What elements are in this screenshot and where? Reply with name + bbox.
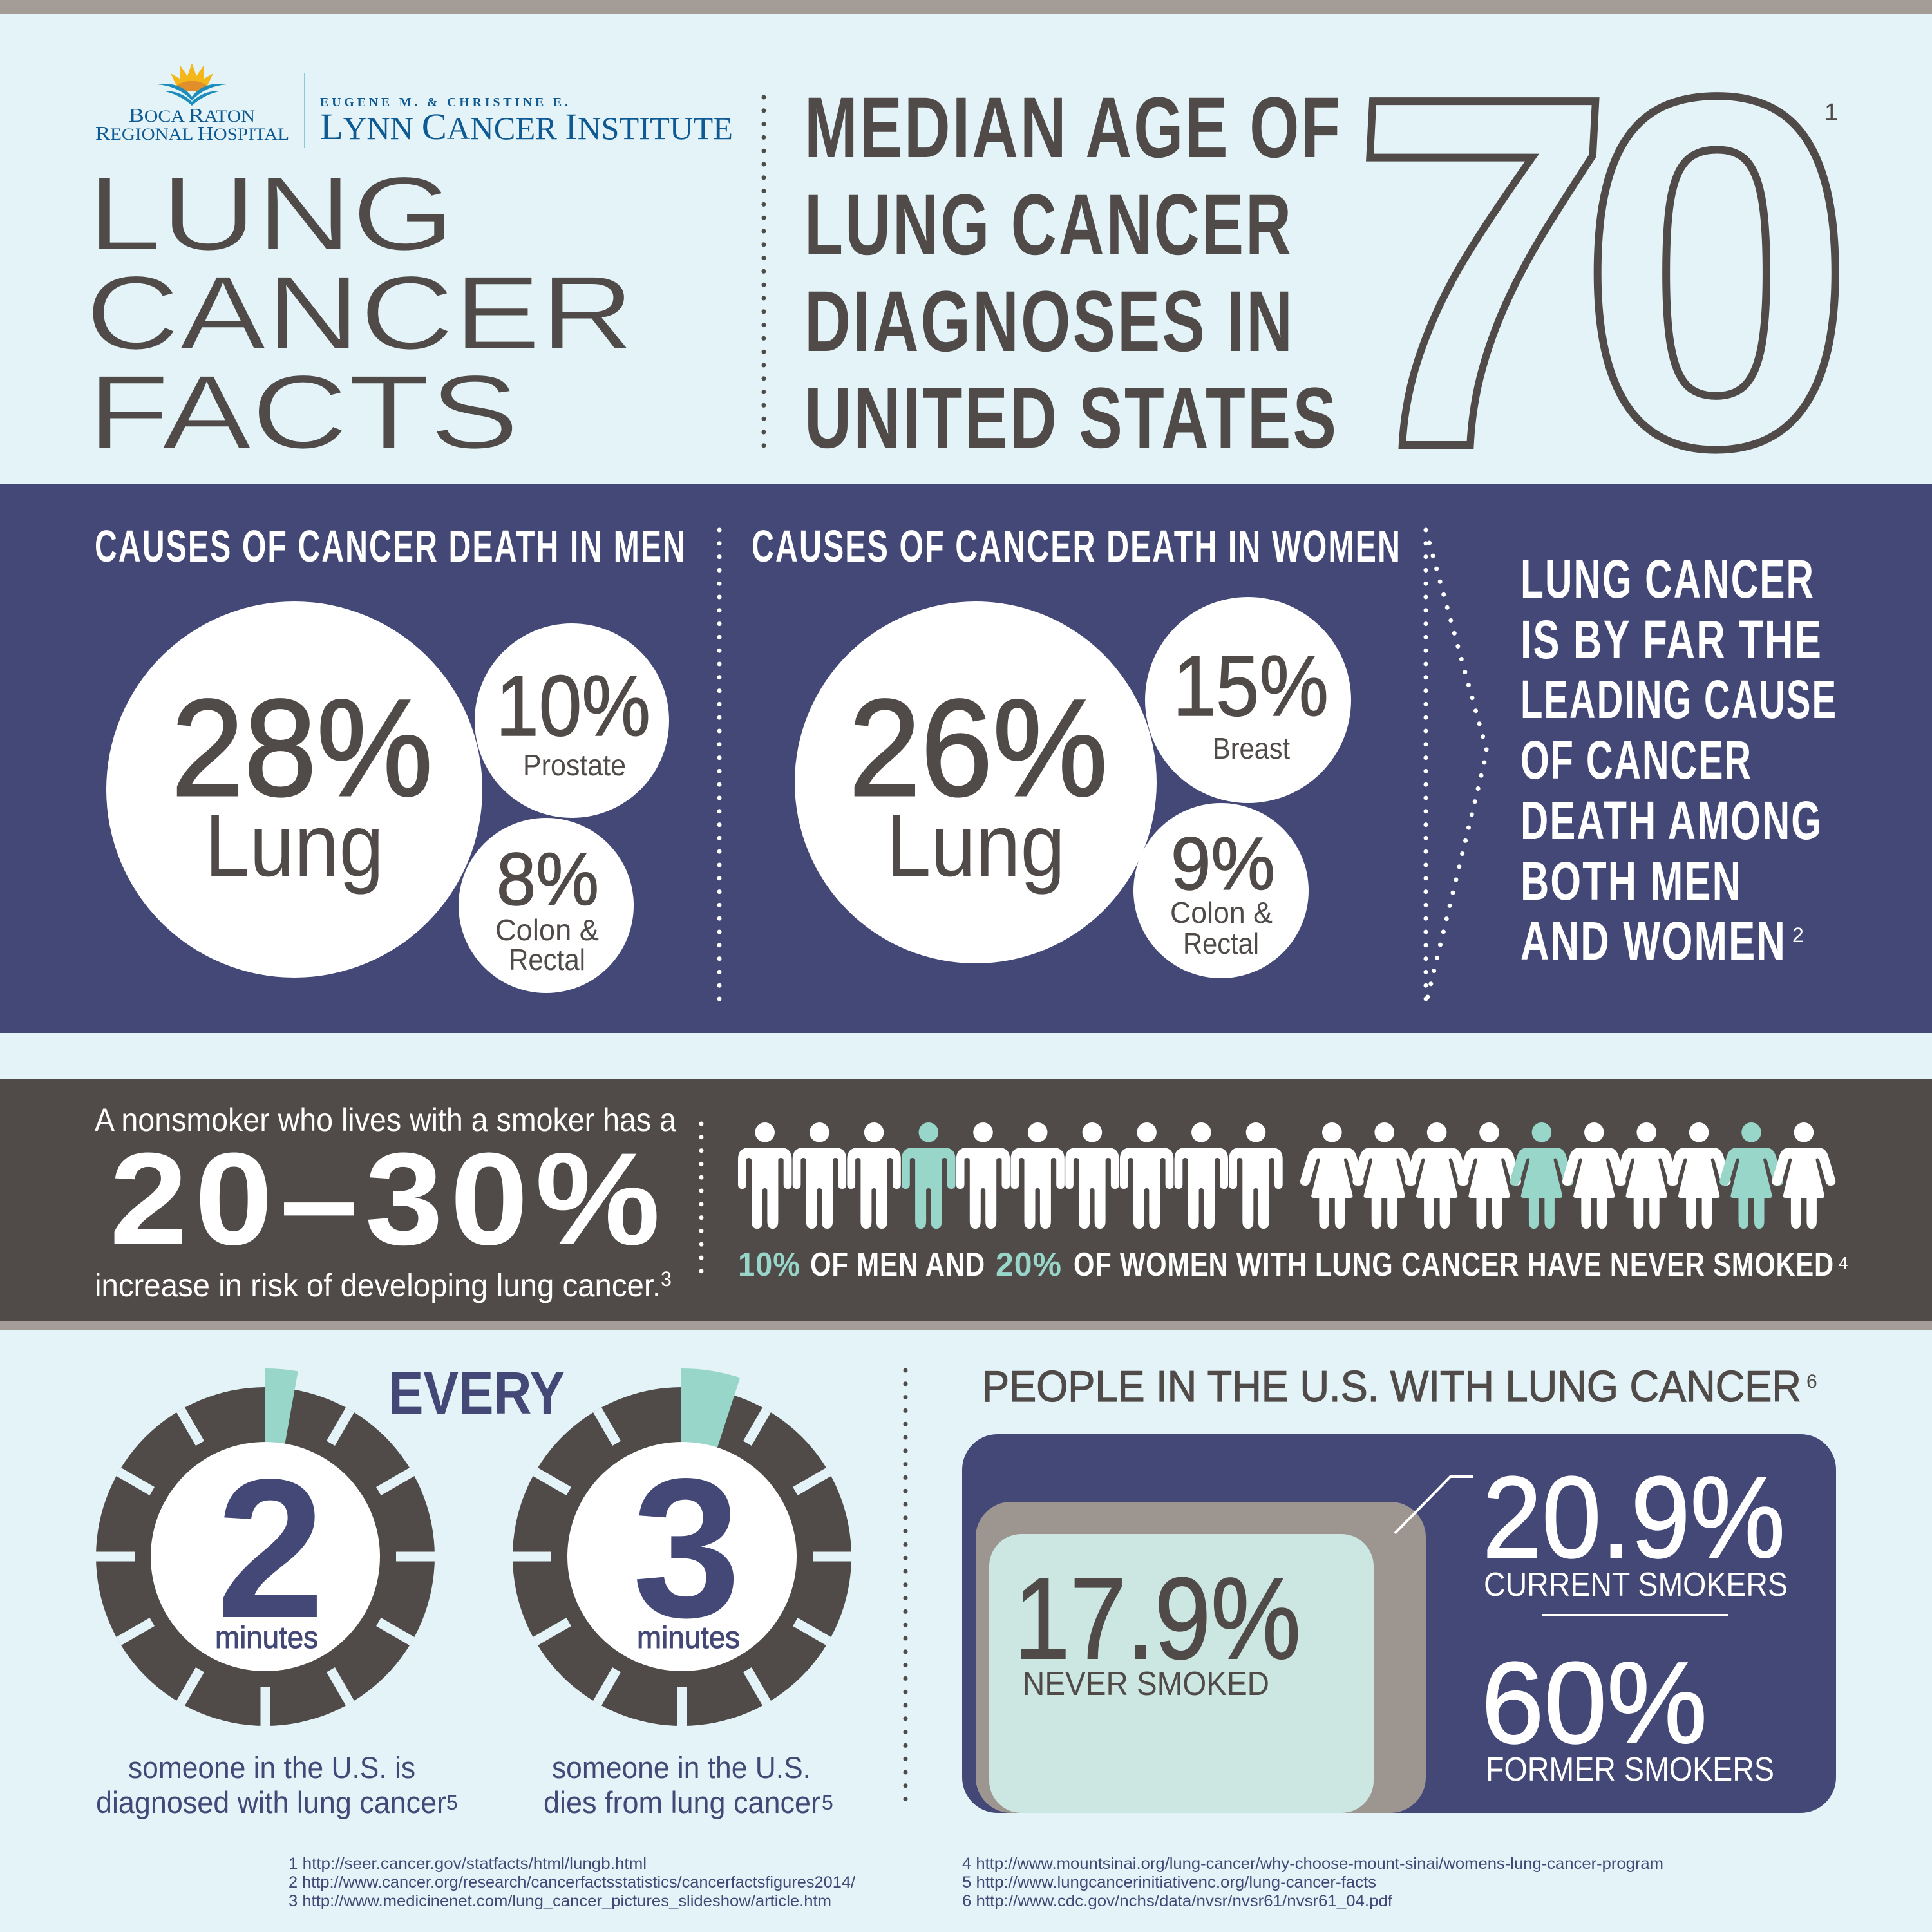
heading: women: CAUSES OF CANCER DEATH IN WOMEN xyxy=(752,521,1401,571)
heading: median age: UNITED STATES xyxy=(804,370,1338,466)
heading: median age xyxy=(804,80,1342,466)
caption: never smoked share: 4 xyxy=(1839,1253,1848,1273)
heading: every: EVERY xyxy=(388,1359,565,1426)
caption: never smoked share: OF MEN AND xyxy=(810,1246,985,1283)
footnotes: right: 4 http://www.mountsinai.org/lung-cancer/why-choose-mount-sinai/womens-lung-cancer-program xyxy=(962,1855,1663,1873)
stat: former smokers: 60% xyxy=(1481,1638,1707,1768)
circles: men: 28% xyxy=(171,671,433,825)
icon: sun and waves xyxy=(157,63,227,106)
logo: Boca Raton Regional Hospital and Lynn Cancer Institute xyxy=(95,63,733,148)
text: deaths caption: 5 xyxy=(822,1791,833,1814)
logo: Boca Raton Regional Hospital and Lynn Cancer Institute: LYNN CANCER INSTITUTE xyxy=(320,106,733,147)
text: diagnosed caption xyxy=(96,1750,458,1819)
text: diagnosed caption: diagnosed with lung cancer xyxy=(96,1785,446,1819)
big outlined number 70: 0 xyxy=(1578,0,1856,551)
stat: never smoked: 17.9% xyxy=(1014,1554,1301,1683)
callout: leading cause: OF CANCER xyxy=(1520,730,1752,790)
footnotes: right xyxy=(962,1855,1663,1910)
circles: women: Rectal xyxy=(1183,927,1259,960)
heading: median age: LUNG CANCER xyxy=(804,177,1293,273)
footnote marker 1: 1 xyxy=(1824,99,1838,126)
text: deaths caption xyxy=(544,1750,833,1819)
circles: men: 10% xyxy=(496,658,650,754)
text: nonsmoker risk: A nonsmoker who lives with a smoker has a xyxy=(95,1102,676,1138)
footnotes: left: 1 http://seer.cancer.gov/statfacts/html/lungb.html xyxy=(289,1855,647,1873)
clock: every 2 minutes xyxy=(96,1368,435,1726)
footnotes: left: 2 http://www.cancer.org/research/cancerfactsstatistics/cancerfactsfigures2014/ xyxy=(289,1873,855,1891)
clock: every 2 minutes: 2 xyxy=(216,1438,325,1660)
footnotes: left xyxy=(289,1855,855,1910)
text: deaths caption: someone in the U.S. xyxy=(552,1750,811,1785)
circles: women xyxy=(795,597,1351,978)
circles: men: 8% xyxy=(497,837,599,921)
heading: people with lung cancer: 6 xyxy=(1806,1371,1817,1392)
hospital name: BOCA RATON xyxy=(129,104,255,126)
text: nonsmoker risk: increase in risk of developing lung cancer. xyxy=(95,1267,692,1303)
institute name: EUGENE M. & CHRISTINE E. xyxy=(320,95,568,109)
callout: leading cause: DEATH AMONG xyxy=(1520,790,1823,851)
title: Lung Cancer Facts: FACTS xyxy=(88,353,519,471)
logo: Boca Raton Regional Hospital and Lynn Cancer Institute: REGIONAL HOSPITAL xyxy=(95,122,289,144)
stat: former smokers xyxy=(1481,1638,1774,1788)
circles: women: 26% xyxy=(849,671,1108,825)
footnotes: right: 6 http://www.cdc.gov/nchs/data/nvsr/nvsr61/nvsr61_04.pdf xyxy=(962,1892,1392,1910)
callout: leading cause: BOTH MEN xyxy=(1520,851,1742,911)
callout: leading cause: 2 xyxy=(1792,923,1806,947)
clock: every 2 minutes: minutes xyxy=(215,1621,318,1655)
clock: every 3 minutes: 3 xyxy=(632,1437,741,1659)
big outlined number 70 xyxy=(1329,0,1856,551)
clock: every 3 minutes: minutes xyxy=(637,1621,740,1655)
circles: men: Prostate xyxy=(523,748,626,782)
heading: median age: MEDIAN AGE OF xyxy=(804,80,1342,176)
text: nonsmoker risk: 3 xyxy=(661,1267,672,1291)
big outlined number 70: 7 xyxy=(1329,0,1622,551)
arrow: dotted chevron xyxy=(1426,530,1487,1005)
text: diagnosed caption: someone in the U.S. is xyxy=(128,1750,415,1785)
title: Lung Cancer Facts: CANCER xyxy=(86,254,634,372)
icons: ten women, two highlighted xyxy=(1300,1122,1835,1229)
circles: men: Colon & xyxy=(495,913,599,947)
callout: leading cause xyxy=(1520,549,1837,971)
stat: current smokers: CURRENT SMOKERS xyxy=(1484,1566,1788,1604)
stat: never smoked: NEVER SMOKED xyxy=(1023,1665,1269,1703)
callout: leading cause: AND WOMEN xyxy=(1520,911,1786,971)
circles: women: Breast xyxy=(1213,732,1290,765)
panel: smoking status xyxy=(962,1434,1836,1813)
circles: women: Lung xyxy=(886,796,1065,895)
footnotes: left: 3 http://www.medicinenet.com/lung_cancer_pictures_slideshow/article.htm xyxy=(289,1892,831,1910)
title: Lung Cancer Facts xyxy=(86,155,634,471)
heading: median age: DIAGNOSES IN xyxy=(804,274,1294,370)
circles: women: 9% xyxy=(1171,822,1275,905)
circles: men: Lung xyxy=(205,796,384,895)
title: Lung Cancer Facts: LUNG xyxy=(88,155,455,272)
panel: causes of cancer death xyxy=(0,484,1932,1033)
stat: former smokers: FORMER SMOKERS xyxy=(1486,1751,1774,1788)
text: deaths caption: dies from lung cancer xyxy=(544,1785,820,1819)
circles: men: Rectal xyxy=(509,943,585,976)
circles: men xyxy=(106,601,669,993)
panel: nonsmoker risk band xyxy=(0,1079,1932,1330)
caption: never smoked share xyxy=(738,1246,1848,1283)
callout: leading cause: IS BY FAR THE xyxy=(1520,609,1823,670)
heading: men: CAUSES OF CANCER DEATH IN MEN xyxy=(95,521,687,571)
stat: current smokers: 20.9% xyxy=(1482,1453,1785,1582)
text: nonsmoker risk xyxy=(95,1102,676,1303)
footnotes: right: 5 http://www.lungcancerinitiativenc.org/lung-cancer-facts xyxy=(962,1873,1376,1891)
icons: ten men, one highlighted xyxy=(738,1122,1283,1229)
callout: leading cause: LUNG CANCER xyxy=(1520,549,1815,609)
heading: people with lung cancer: PEOPLE IN THE U.S. WITH LUNG CANCER xyxy=(982,1362,1801,1411)
circles: women: Colon & xyxy=(1170,896,1273,929)
circles: women: 15% xyxy=(1173,638,1329,734)
text: diagnosed caption: 5 xyxy=(446,1791,458,1814)
clock: every 3 minutes xyxy=(513,1368,851,1726)
caption: never smoked share: 10% xyxy=(738,1246,800,1283)
caption: never smoked share: 20% xyxy=(996,1246,1062,1283)
text: nonsmoker risk: 20–30% xyxy=(109,1126,667,1273)
